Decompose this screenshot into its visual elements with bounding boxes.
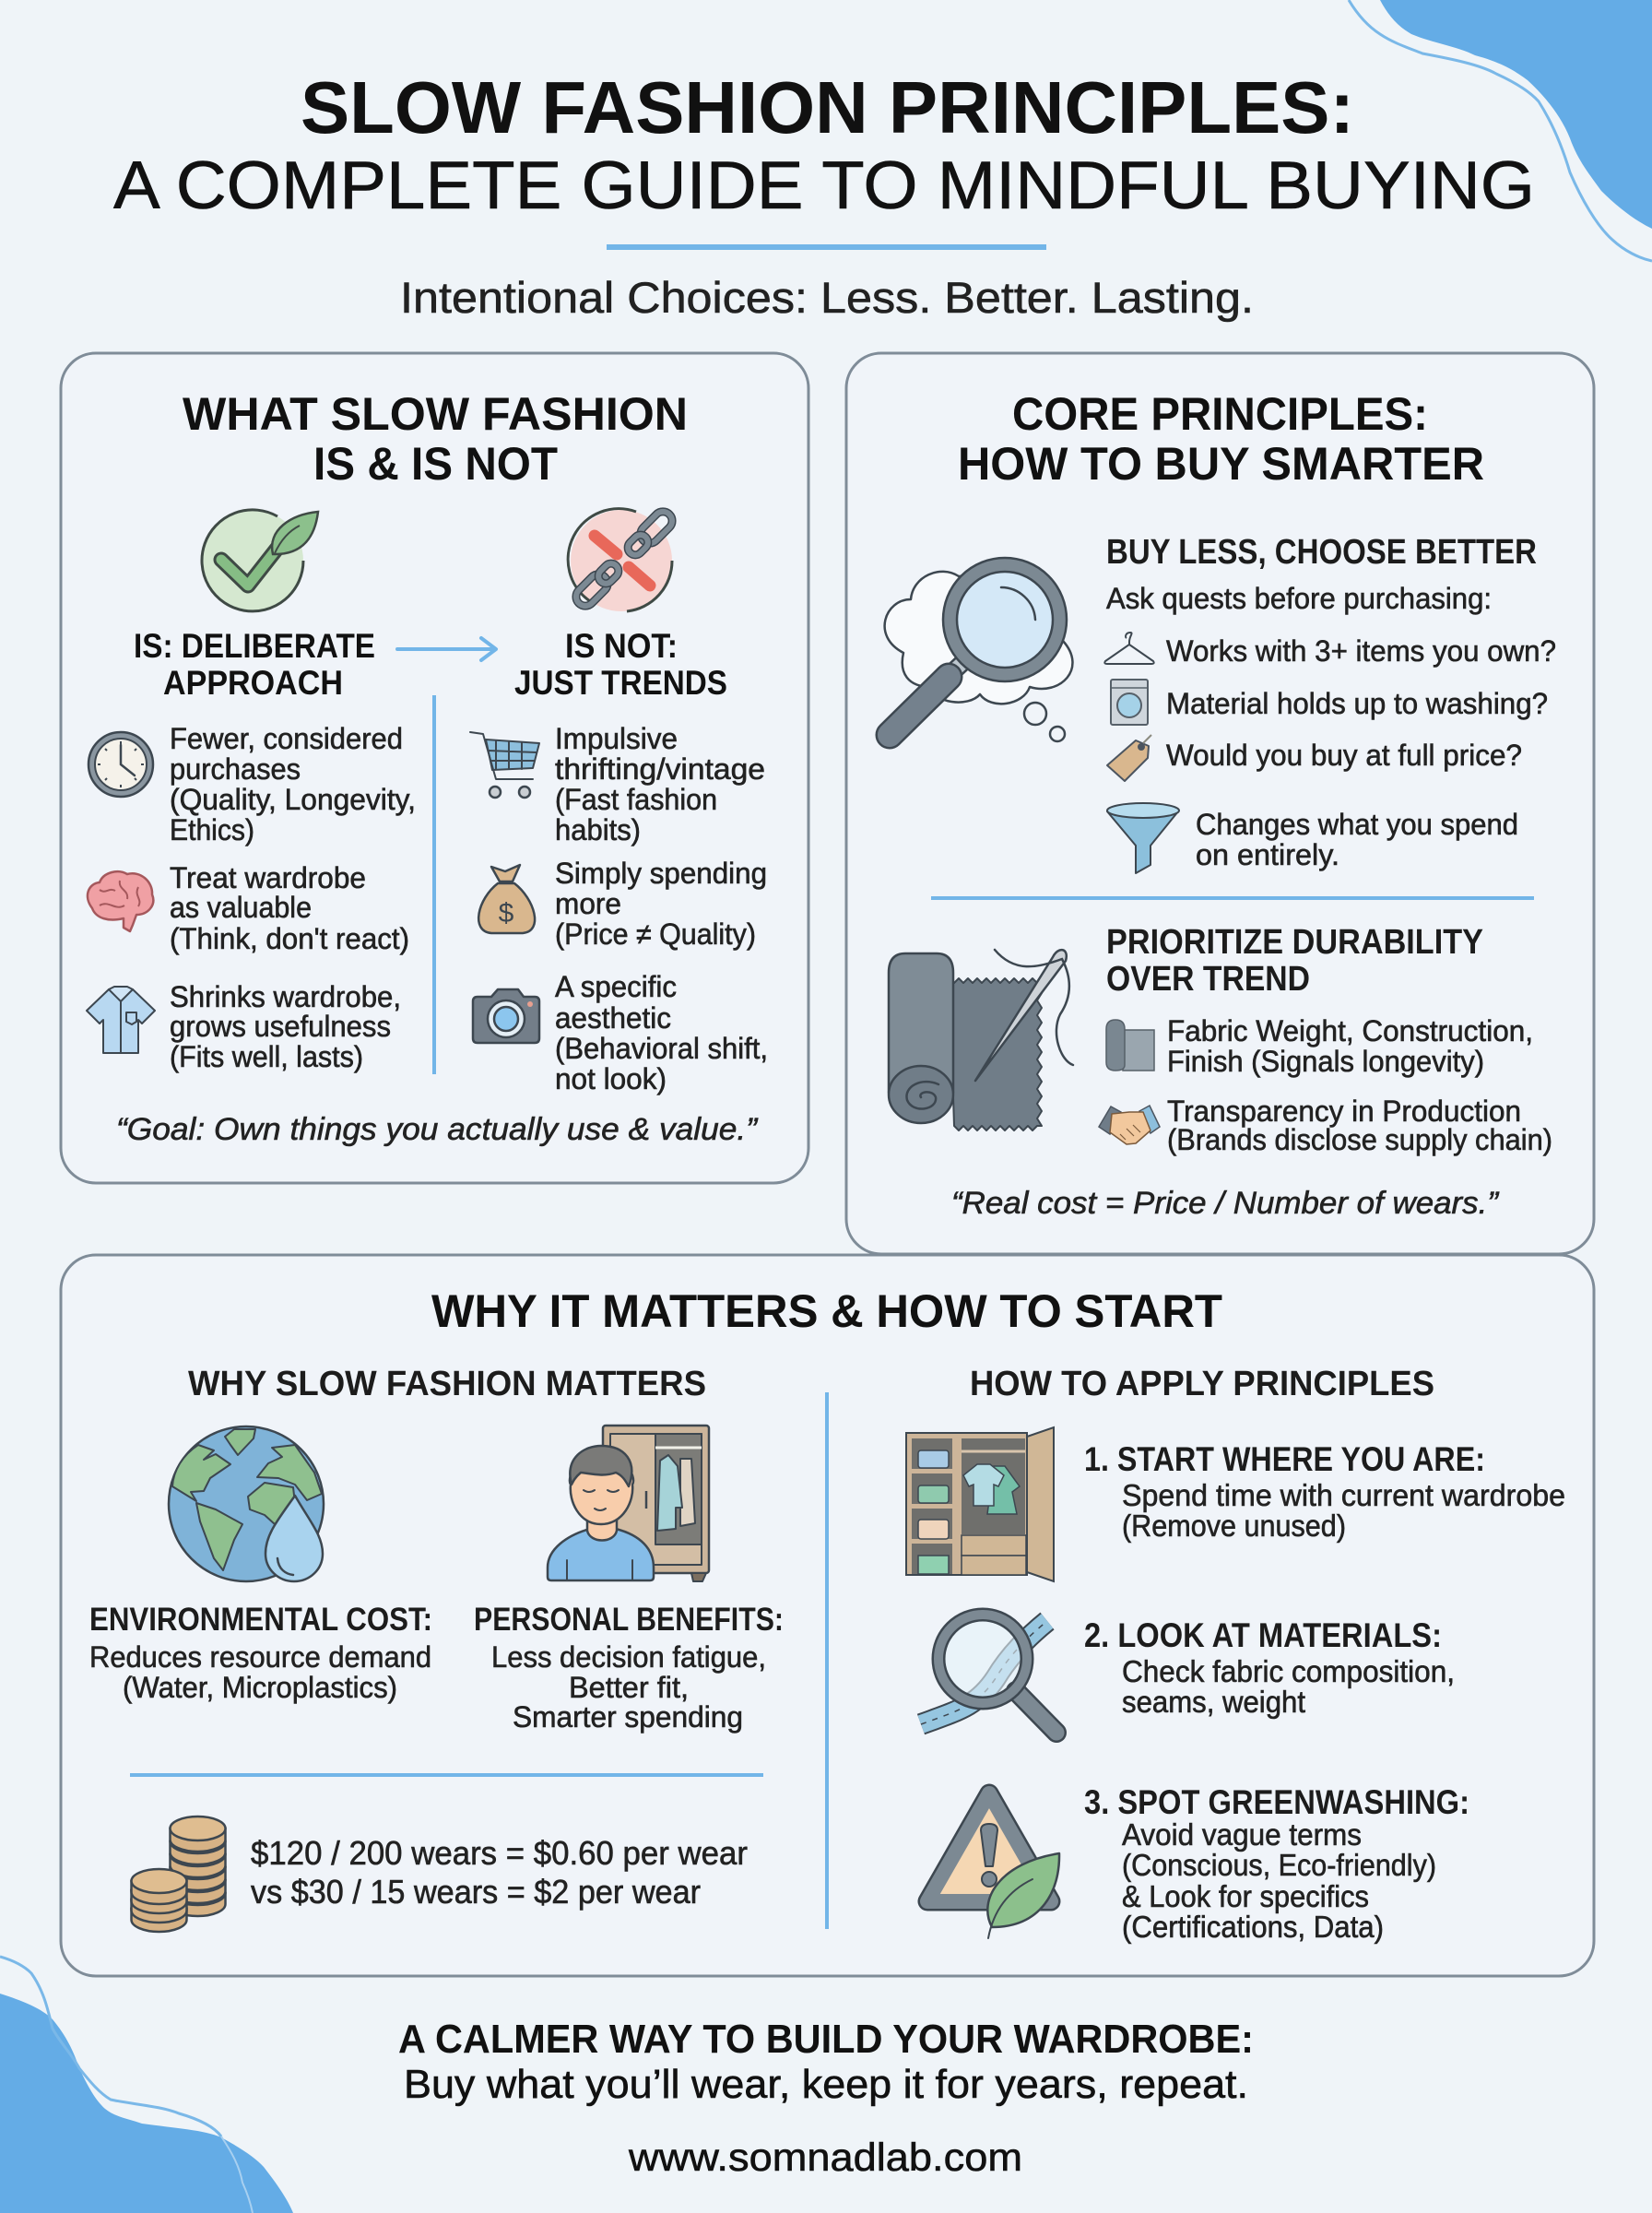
footer message: Buy what you’ll wear, keep it for years, repeat. [404, 2062, 1248, 2107]
icon: magnifier over thought cloud [885, 558, 1072, 741]
text: step 3: (Conscious, Eco-friendly) [1122, 1848, 1436, 1882]
text: transparency: (Brands disclose supply chain) [1167, 1123, 1552, 1156]
text: transparency: Transparency in Production [1167, 1095, 1521, 1128]
label: is not just trends: IS NOT: [565, 627, 678, 665]
panel heading [183, 388, 688, 490]
text: impulsive thrifting: habits) [555, 813, 641, 846]
text: a specific aesthetic: not look) [555, 1062, 667, 1095]
label: is deliberate approach: IS: DELIBERATE [134, 627, 375, 665]
block: personal benefits: Less decision fatigue, [491, 1640, 766, 1674]
icon: small fabric roll [1106, 1020, 1154, 1071]
icon: funnel [1107, 803, 1179, 873]
text: simply spending more: (Price ≠ Quality) [555, 917, 756, 951]
decorative blob: top right [1349, 0, 1652, 261]
icon: broken chain [568, 508, 676, 611]
text: fabric weight: Finish (Signals longevity) [1167, 1045, 1484, 1078]
text: shrinks wardrobe grows usefulness: Shrinks wardrobe, [170, 980, 401, 1013]
text: transparency [1167, 1095, 1552, 1156]
panel heading [958, 388, 1484, 490]
text: would you buy: Would you buy at full price? [1166, 739, 1522, 772]
text: step 2: seams, weight [1122, 1685, 1305, 1719]
title: A COMPLETE GUIDE TO MINDFUL BUYING [113, 148, 1535, 223]
panel: core principles [846, 353, 1594, 1254]
text: simply spending more: more [555, 887, 621, 920]
text: fewer considered purchases [170, 722, 416, 846]
text: step 3: Avoid vague terms [1122, 1817, 1362, 1852]
subheading: buy less: BUY LESS, CHOOSE BETTER [1106, 533, 1537, 572]
block: personal benefits [474, 1602, 784, 1734]
text: shrinks wardrobe grows usefulness: grows usefulness [170, 1010, 391, 1043]
text: shrinks wardrobe grows usefulness [170, 980, 401, 1073]
subheading: prioritize durability: OVER TREND [1106, 960, 1310, 999]
text: material holds up: Material holds up to washing? [1166, 687, 1548, 720]
text: step 1: Spend time with current wardrobe [1122, 1478, 1565, 1512]
block: environmental cost: (Water, Microplastics) [123, 1671, 397, 1704]
footer message [398, 2017, 1254, 2107]
icon: money bag: $ [499, 898, 514, 929]
text: step 3: 3. SPOT GREENWASHING: [1084, 1783, 1469, 1821]
icon: camera [473, 989, 539, 1043]
text: fewer considered purchases: Ethics) [170, 813, 254, 846]
block: environmental cost [89, 1602, 432, 1704]
icon: money bag [478, 865, 535, 933]
tagline: Intentional Choices: Less. Better. Lasting. [400, 273, 1254, 322]
icon: open wardrobe [906, 1427, 1054, 1581]
icon: globe with water drop [169, 1426, 324, 1581]
label: is deliberate approach [134, 627, 375, 702]
title: SLOW FASHION PRINCIPLES: [301, 66, 1354, 148]
block: environmental cost: ENVIRONMENTAL COST: [89, 1602, 432, 1638]
text: simply spending more [555, 857, 767, 951]
text: step 1: 1. START WHERE YOU ARE: [1084, 1440, 1485, 1478]
subheading: prioritize durability: PRIORITIZE DURABILITY [1106, 923, 1483, 962]
block: personal benefits: Better fit, [569, 1671, 689, 1704]
arrow [397, 638, 496, 660]
label: is not just trends [514, 627, 727, 702]
text: impulsive thrifting: thrifting/vintage [555, 752, 765, 786]
text: changes what you spend: on entirely. [1196, 838, 1339, 871]
panel heading: HOW TO BUY SMARTER [958, 438, 1484, 490]
text: step 1: (Remove unused) [1122, 1509, 1346, 1543]
text: cost per wear: vs $30 / 15 wears = $2 per wear [251, 1873, 701, 1911]
icon: price tag [1107, 735, 1151, 781]
icon: clock [88, 732, 153, 797]
subheading: prioritize durability [1106, 923, 1483, 999]
text: impulsive thrifting [555, 722, 765, 846]
icon: warning triangle with leaf [927, 1793, 1059, 1938]
title [113, 66, 1535, 223]
subheading: why slow fashion matters: WHY SLOW FASHION MATTERS [188, 1365, 706, 1403]
text: treat wardrobe as valuable: (Think, don't react) [170, 922, 409, 955]
icon: washing machine [1111, 680, 1148, 725]
text: step 2: 2. LOOK AT MATERIALS: [1084, 1616, 1442, 1654]
text: treat wardrobe as valuable: Treat wardrobe [170, 861, 366, 894]
text: step 3: (Certifications, Data) [1122, 1910, 1384, 1944]
text: step 3 [1084, 1783, 1469, 1944]
quote: real cost: “Real cost = Price / Number of wears.” [951, 1186, 1500, 1221]
text: changes what you spend [1196, 808, 1518, 871]
panel heading: WHAT SLOW FASHION [183, 388, 688, 440]
icon: person and wardrobe [548, 1426, 709, 1581]
website url: www.somnadlab.com [628, 2136, 1022, 2180]
text: fabric weight [1167, 1014, 1533, 1078]
label: is not just trends: JUST TRENDS [514, 664, 727, 702]
icon: handshake [1099, 1106, 1160, 1144]
label: is deliberate approach: APPROACH [163, 664, 343, 702]
panel: why it matters and how to start [61, 1255, 1594, 1976]
text: shrinks wardrobe grows usefulness: (Fits well, lasts) [170, 1040, 363, 1073]
text: treat wardrobe as valuable [170, 861, 409, 955]
icon: magnifier over seam [921, 1615, 1056, 1733]
panel heading: WHY IT MATTERS & HOW TO START [431, 1285, 1222, 1337]
text: cost per wear [251, 1834, 748, 1911]
text: treat wardrobe as valuable: as valuable [170, 891, 312, 924]
panel heading: CORE PRINCIPLES: [1012, 388, 1428, 440]
text: fabric weight: Fabric Weight, Construction, [1167, 1014, 1533, 1047]
title divider [607, 244, 1046, 250]
panel: what slow fashion is and is not [61, 353, 808, 1183]
text: simply spending more: Simply spending [555, 857, 767, 890]
text: step 1 [1084, 1440, 1565, 1543]
decorative blob: bottom left [0, 1957, 293, 2213]
subheading: how to apply principles: HOW TO APPLY PRINCIPLES [970, 1365, 1434, 1403]
text: a specific aesthetic: (Behavioral shift, [555, 1032, 768, 1065]
text: a specific aesthetic: A specific [555, 970, 677, 1003]
text: a specific aesthetic: aesthetic [555, 1001, 671, 1035]
icon: fabric roll and needle [889, 950, 1073, 1130]
text: step 3: & Look for specifics [1122, 1879, 1369, 1913]
text: a specific aesthetic [555, 970, 768, 1095]
text: step 2: Check fabric composition, [1122, 1654, 1455, 1688]
text: fewer considered purchases: Fewer, considered [170, 722, 403, 755]
icon: brain [88, 871, 153, 931]
text: step 2 [1084, 1616, 1455, 1719]
text: fewer considered purchases: purchases [170, 752, 301, 786]
block: personal benefits: PERSONAL BENEFITS: [474, 1602, 784, 1638]
text: fewer considered purchases: (Quality, Longevity, [170, 783, 416, 816]
text: cost per wear: $120 / 200 wears = $0.60 per wear [251, 1834, 748, 1872]
footer message: A CALMER WAY TO BUILD YOUR WARDROBE: [398, 2017, 1254, 2062]
icon: shopping cart [470, 732, 539, 798]
icon: shirt [87, 987, 155, 1053]
text: impulsive thrifting: Impulsive [555, 722, 678, 755]
text: ask quests: Ask quests before purchasing: [1106, 582, 1492, 615]
icon: hanger [1104, 633, 1154, 664]
text: works with 3 items: Works with 3+ items you own? [1166, 634, 1556, 668]
panel heading: IS & IS NOT [313, 438, 558, 490]
block: personal benefits: Smarter spending [513, 1700, 743, 1734]
icon: green check with leaf [202, 510, 318, 611]
text: changes what you spend: Changes what you spend [1196, 808, 1518, 841]
block: environmental cost: Reduces resource demand [89, 1640, 431, 1674]
icon: coin stacks [131, 1817, 225, 1932]
text: impulsive thrifting: (Fast fashion [555, 783, 717, 816]
quote: goal: “Goal: Own things you actually use & value.” [116, 1112, 759, 1147]
